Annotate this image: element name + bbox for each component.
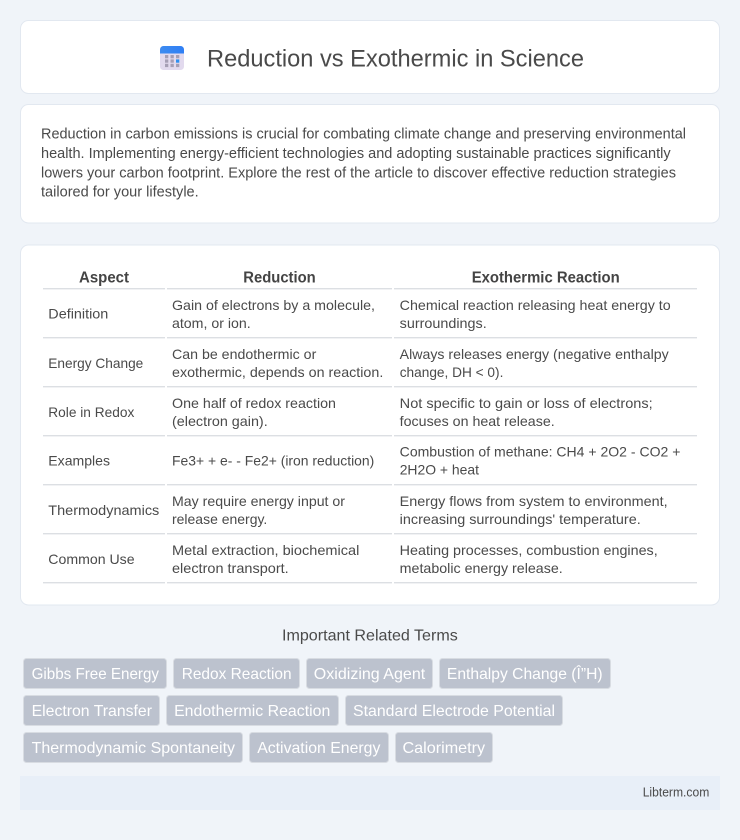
table row: definition: atom, or ion.	[172, 315, 251, 331]
chip: Redox Reaction: Redox Reaction	[182, 666, 292, 683]
table header: Aspect	[79, 270, 130, 287]
table row: thermodynamics: Energy flows from system to environment,	[400, 493, 668, 509]
table row: role in redox: Not specific to gain or loss of electrons;	[400, 395, 653, 411]
footer	[20, 776, 720, 810]
chip: Gibbs Free Energy	[24, 658, 166, 688]
table row: energy change	[48, 346, 669, 380]
table row: role in redox	[48, 395, 653, 429]
chip: Redox Reaction	[174, 658, 300, 688]
text block: intro paragraph: lowers your carbon footprint. Explore the rest of the article to discover effective reduction strategies	[41, 166, 676, 182]
text block: intro paragraph: Reduction in carbon emissions is crucial for combating climate change and preserving environmental	[41, 127, 686, 143]
table row: thermodynamics: May require energy input or	[172, 493, 345, 509]
chip: Oxidizing Agent	[306, 658, 432, 688]
table row: common use: Common Use	[48, 551, 135, 567]
panel: introduction	[20, 104, 720, 223]
table row: energy change: Energy Change	[48, 355, 144, 371]
panel: comparison table	[20, 245, 720, 605]
table row: role in redox: (electron gain).	[172, 413, 268, 429]
chip: Calorimetry	[396, 732, 492, 762]
table row: thermodynamics: Thermodynamics	[48, 502, 159, 518]
table header: Exothermic Reaction	[472, 270, 620, 287]
heading: important related terms: Important Related Terms	[282, 628, 458, 645]
table row: definition: Gain of electrons by a molecule,	[172, 297, 375, 313]
text block: intro paragraph: health. Implementing energy-efficient technologies and adopting sustainable practices significantly	[41, 146, 671, 162]
table row: energy change: Always releases energy (negative enthalpy	[400, 346, 669, 362]
icon: calendar	[160, 46, 184, 70]
chip: Oxidizing Agent: Oxidizing Agent	[314, 666, 426, 683]
panel: title card	[20, 20, 720, 94]
table row: common use: Heating processes, combustion engines,	[400, 542, 658, 558]
text block: intro paragraph: tailored for your lifestyle.	[41, 185, 199, 201]
table row: role in redox: Role in Redox	[48, 404, 134, 420]
chip: Standard Electrode Potential: Standard Electrode Potential	[353, 703, 555, 720]
table row: energy change: Can be endothermic or	[172, 346, 317, 362]
chip: Endothermic Reaction	[166, 696, 338, 726]
table row: thermodynamics: release energy.	[172, 511, 267, 527]
chip: Gibbs Free Energy: Gibbs Free Energy	[32, 666, 159, 683]
text block: intro paragraph	[41, 127, 686, 201]
table row: thermodynamics: increasing surroundings' temperature.	[400, 511, 641, 527]
table row: thermodynamics	[48, 493, 668, 527]
table row: common use	[48, 542, 658, 576]
table row: energy change: exothermic, depends on reaction.	[172, 364, 383, 380]
chip: Endothermic Reaction: Endothermic Reaction	[174, 703, 330, 720]
chip: Standard Electrode Potential	[346, 696, 562, 726]
table row: definition: surroundings.	[400, 315, 487, 331]
table row: role in redox: One half of redox reaction	[172, 395, 336, 411]
table row: examples	[48, 444, 680, 478]
table row: examples: Combustion of methane: CH4 + 2O2 - CO2 +	[400, 444, 680, 460]
table row: definition: Definition	[48, 306, 108, 322]
table row: energy change: change, DH < 0).	[400, 364, 503, 380]
table row: examples: Examples	[48, 453, 110, 469]
table row: common use: metabolic energy release.	[400, 560, 563, 576]
table row: common use: Metal extraction, biochemical	[172, 542, 359, 558]
related term chips	[24, 658, 610, 762]
chip: Thermodynamic Spontaneity: Thermodynamic Spontaneity	[32, 740, 235, 757]
title: Reduction vs Exothermic in Science	[207, 46, 584, 73]
table row: examples: 2H2O + heat	[400, 462, 479, 478]
footer credit: Libterm.com	[643, 786, 709, 800]
table row: role in redox: focuses on heat release.	[400, 413, 555, 429]
chip: Thermodynamic Spontaneity	[24, 732, 242, 762]
table row: definition: Chemical reaction releasing heat energy to	[400, 297, 671, 313]
table row: common use: electron transport.	[172, 560, 289, 576]
chip: Electron Transfer: Electron Transfer	[32, 703, 153, 720]
table row: examples: Fe3+ + e- - Fe2+ (iron reduction)	[172, 453, 374, 469]
chip: Enthalpy Change: Enthalpy Change (Î”H)	[447, 664, 603, 683]
table header	[79, 270, 620, 287]
table header: Reduction	[243, 270, 316, 287]
table row: definition	[48, 297, 671, 331]
chip: Electron Transfer	[24, 696, 160, 726]
chip: Activation Energy: Activation Energy	[257, 740, 380, 757]
chip: Enthalpy Change	[440, 658, 610, 688]
chip: Calorimetry: Calorimetry	[402, 740, 485, 757]
chip: Activation Energy	[250, 732, 388, 762]
